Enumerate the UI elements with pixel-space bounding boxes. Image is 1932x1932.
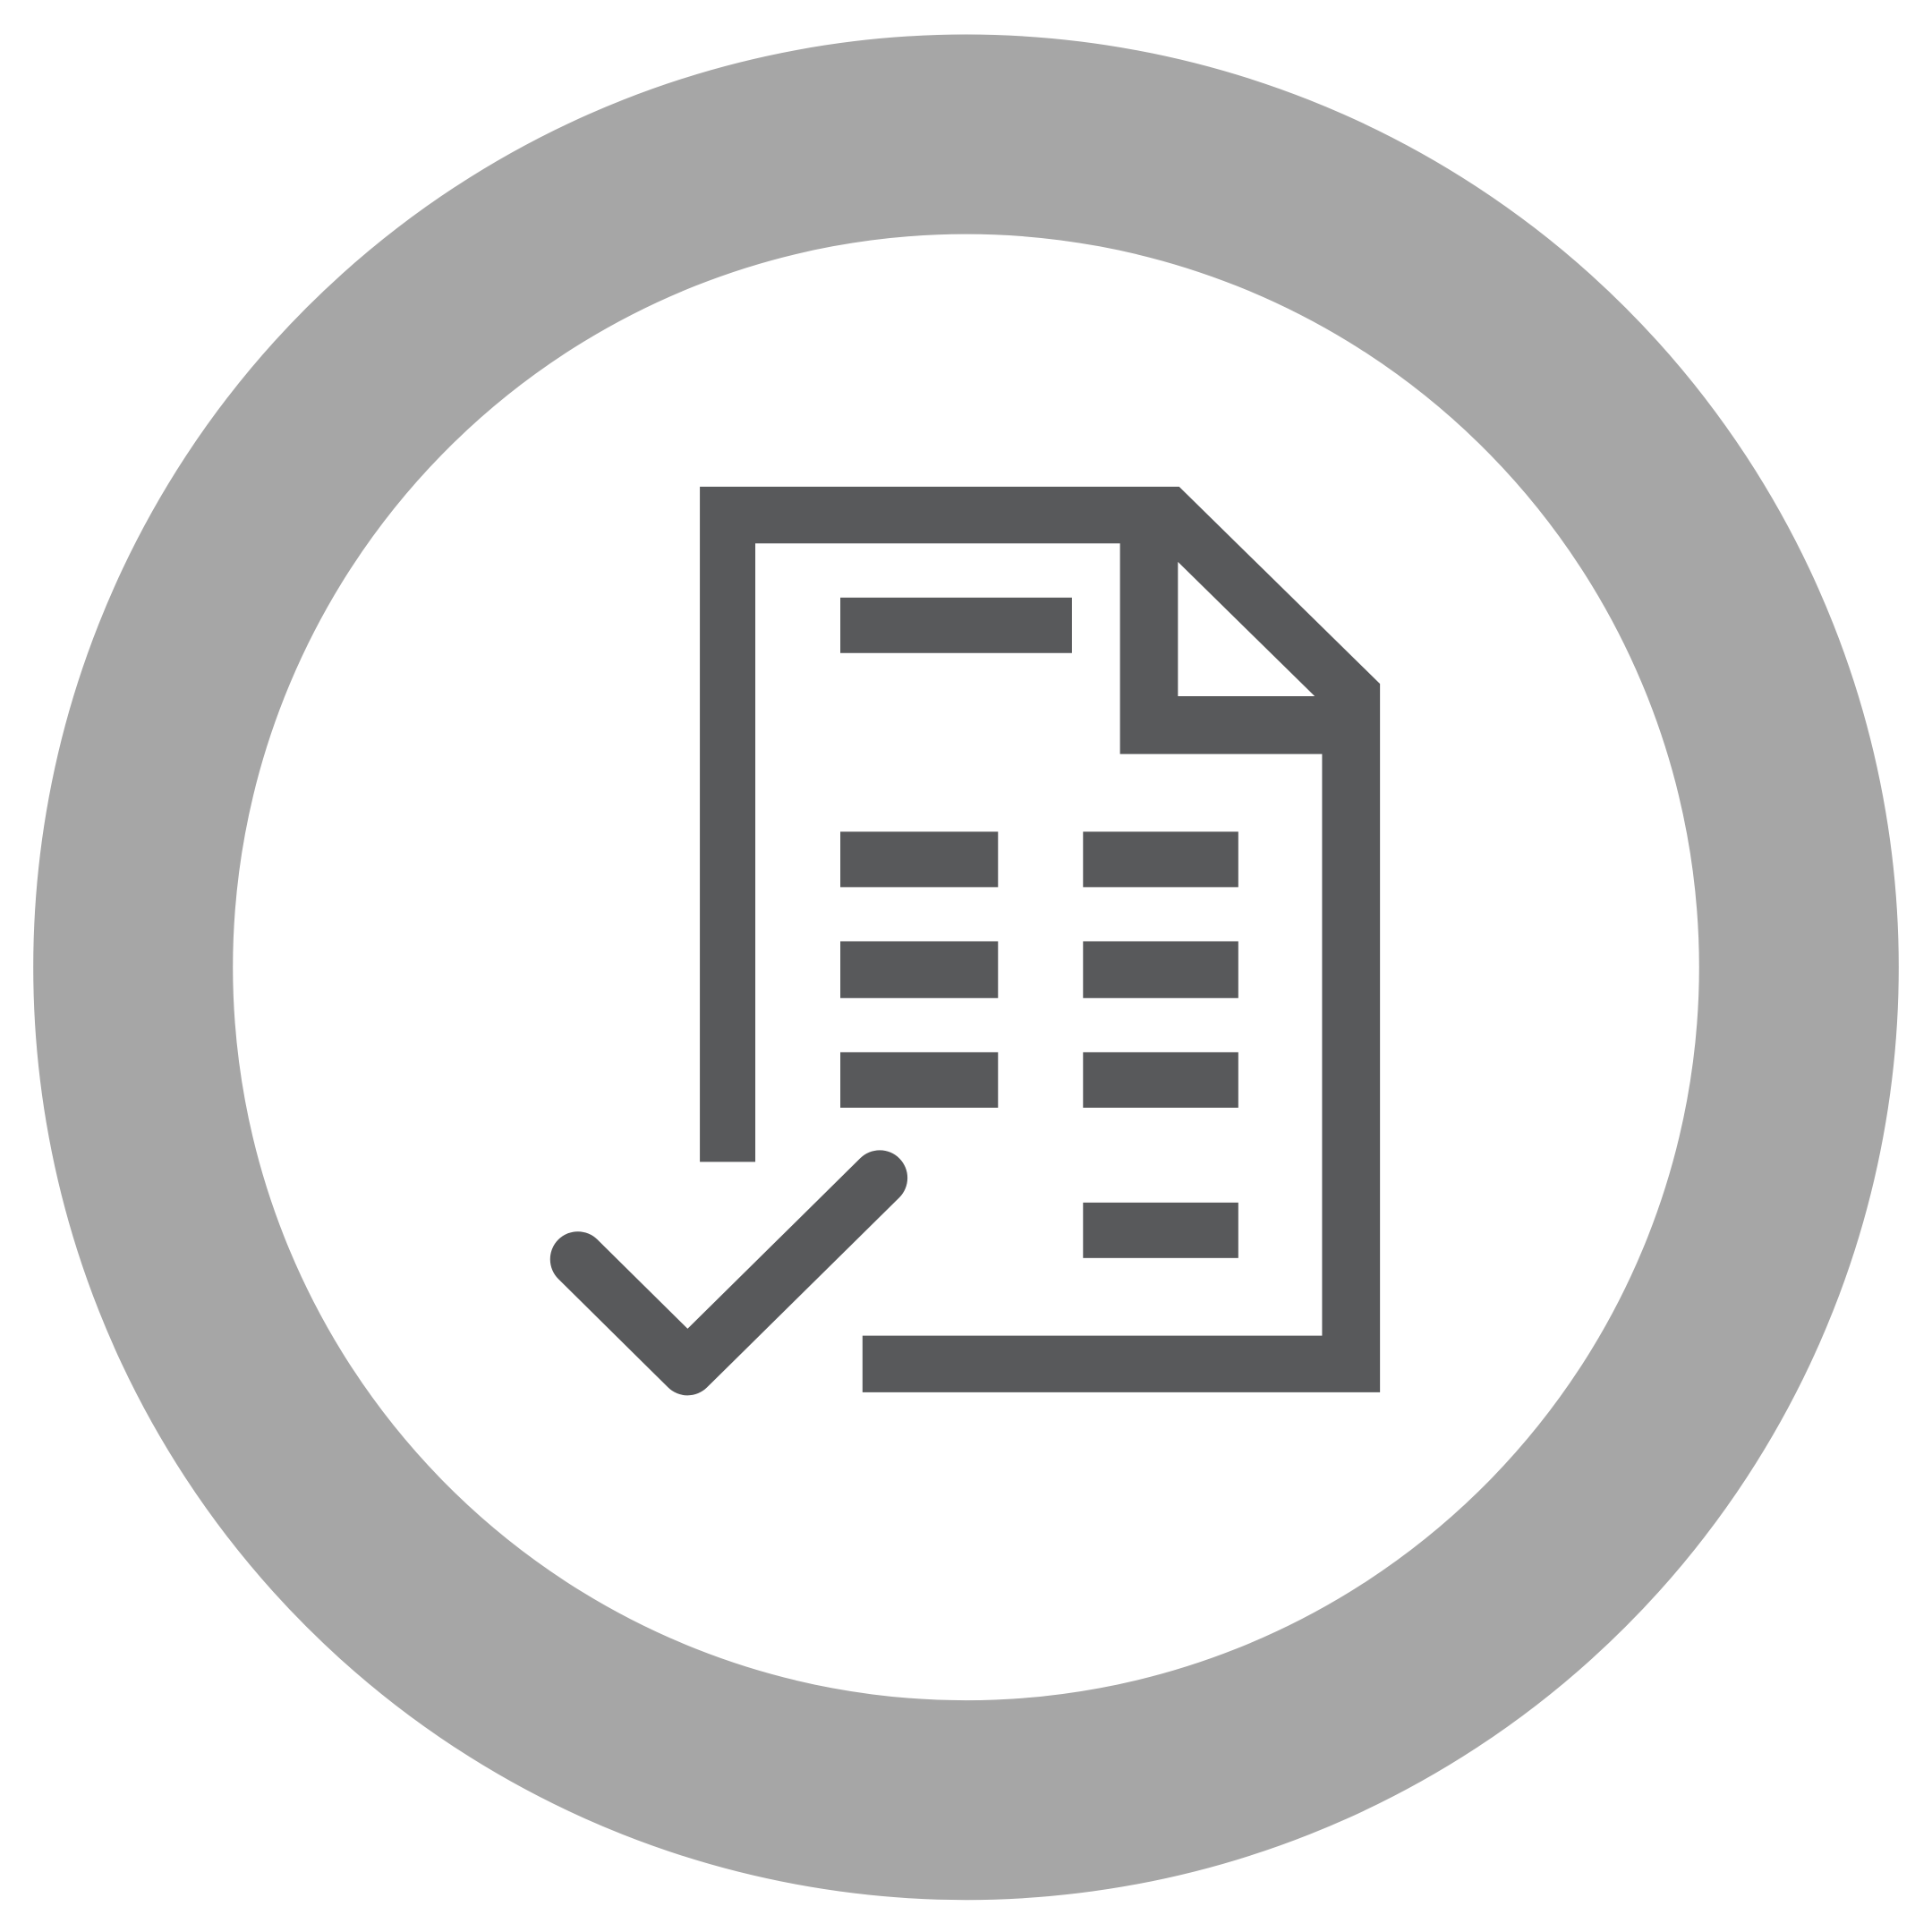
icon: document <box>700 487 1380 1392</box>
title line <box>840 598 1072 653</box>
left column lines <box>840 831 998 1108</box>
document outline with folded corner <box>700 487 1380 1392</box>
ring <box>133 134 1799 1800</box>
icon: checkmark <box>578 1178 880 1367</box>
right column lines <box>1083 831 1238 1258</box>
